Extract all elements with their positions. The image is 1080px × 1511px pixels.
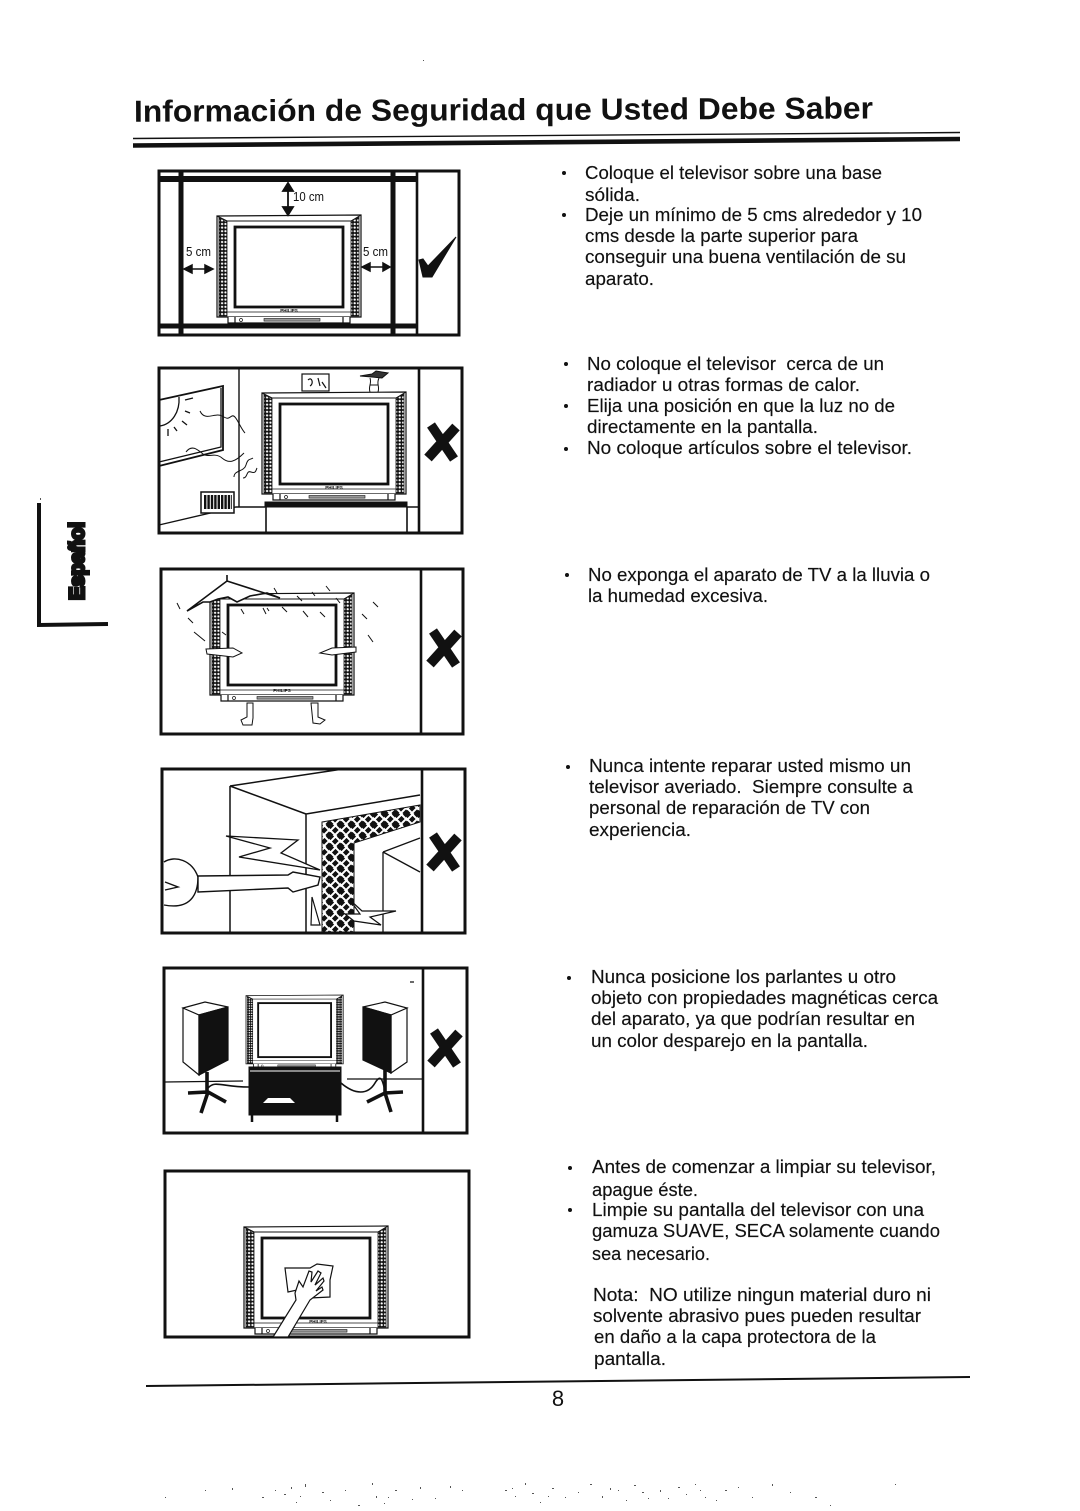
page number: 8 — [552, 1386, 564, 1411]
text block: placement and ventilation — [562, 162, 922, 289]
icon: cross — [430, 835, 458, 869]
television — [217, 215, 361, 323]
text block: placement and ventilation: cms desde la parte superior para — [585, 225, 859, 246]
label: 5 cm right: 5 cm — [363, 245, 388, 259]
text block: repair warning: personal de reparación de TV con — [589, 797, 870, 818]
icon: cross — [430, 631, 458, 665]
legs — [241, 703, 325, 725]
right speaker — [363, 1002, 407, 1112]
text block: cleaning instructions: sea necesario. — [592, 1243, 710, 1264]
radiator vent — [201, 492, 234, 513]
text block: heat and light: Elija una posición en que la luz no de — [587, 395, 895, 416]
vase on television — [360, 371, 388, 392]
brand label: PHILIPS — [280, 308, 298, 313]
brand label: PHILIPS — [325, 485, 343, 490]
text block: rain and humidity: No exponga el aparato de TV a la lluvia o — [588, 564, 930, 585]
text block: note: Nota: NO utilize ningun material duro ni — [593, 1284, 931, 1305]
cabinet lines — [230, 769, 420, 932]
brand label: PHILIPS — [273, 688, 291, 693]
text block: placement and ventilation: conseguir una buena ventilación de su — [585, 246, 906, 267]
text block: heat and light: No coloque artículos sobre el televisor. — [587, 437, 912, 458]
hand — [273, 1271, 324, 1337]
text block: repair warning — [566, 755, 914, 840]
woven back panel — [322, 805, 420, 932]
panel: speakers and magnets — [164, 968, 467, 1133]
text block: note: en daño a la capa protectora de la — [594, 1326, 877, 1347]
text block: placement and ventilation: aparato. — [585, 268, 654, 289]
text block: heat and light: directamente en la pantalla. — [587, 416, 818, 437]
side tab: language marker — [39, 503, 108, 625]
label: 5 cm left: 5 cm — [186, 245, 211, 259]
cleaning cloth — [285, 1264, 333, 1298]
text block: placement and ventilation: Deje un mínimo de 5 cms alrededor y 10 — [585, 204, 922, 225]
text block: repair warning: televisor averiado. Siempre consulte a — [589, 776, 914, 797]
text block: note: solvente abrasivo pues pueden resultar — [593, 1305, 921, 1326]
text block: cleaning instructions: Antes de comenzar a limpiar su televisor, — [592, 1156, 936, 1177]
panel: heat, sunlight and objects on top — [159, 368, 462, 533]
text block: repair warning: experiencia. — [589, 819, 691, 840]
icon: check mark — [419, 237, 456, 277]
text block: cleaning instructions: apague éste. — [592, 1179, 698, 1200]
hands carrying television — [206, 647, 356, 657]
roof over television — [187, 575, 280, 611]
text block: magnetic objects: del aparato, ya que podrían resultar en — [591, 1008, 915, 1029]
text block: placement and ventilation: sólida. — [585, 184, 640, 205]
text block: repair warning: Nunca intente reparar usted mismo un — [589, 755, 911, 776]
text block: heat and light: radiador u otras formas de calor. — [587, 374, 860, 395]
arrow: 10 cm clearance — [283, 183, 293, 215]
picture frame on television — [302, 374, 329, 391]
arrow: left clearance — [184, 265, 213, 273]
left speaker — [183, 1002, 228, 1113]
text block: magnetic objects: Nunca posicione los parlantes u otro — [591, 966, 896, 987]
television — [262, 392, 406, 500]
text block: magnetic objects: objeto con propiedades magnéticas cerca — [591, 987, 939, 1008]
panel: correct ventilation clearance — [159, 171, 459, 335]
heat waves — [186, 411, 257, 478]
text block: heat and light — [564, 353, 912, 458]
lightning bolt upper — [226, 836, 320, 870]
panel: rain and moisture — [161, 569, 463, 734]
text block: placement and ventilation: Coloque el televisor sobre una base — [585, 162, 882, 183]
text block: cleaning instructions — [568, 1156, 940, 1264]
text block: cleaning instructions: gamuza SUAVE, SECA solamente cuando — [592, 1220, 940, 1241]
text block: note — [593, 1284, 931, 1369]
brand label: PHILIPS — [309, 1319, 327, 1324]
cabinet — [249, 1067, 341, 1122]
speaker cables — [208, 1078, 385, 1092]
title: Información de Seguridad que Usted Debe Saber — [134, 91, 873, 129]
text block: note: pantalla. — [594, 1348, 666, 1369]
rain — [177, 586, 378, 642]
title double rule — [133, 132, 960, 146]
text block: magnetic objects: un color desparejo en la pantalla. — [591, 1030, 868, 1051]
text block: heat and light: No coloque el televisor cerca de un — [587, 353, 884, 374]
television — [210, 593, 354, 701]
lightning bolt lower — [345, 900, 396, 925]
text block: magnetic objects — [567, 966, 939, 1051]
arrow: right clearance — [362, 263, 390, 271]
stand — [265, 502, 407, 532]
text block: cleaning instructions: Limpie su pantalla del televisor con una — [592, 1199, 925, 1220]
icon: cross — [428, 425, 456, 459]
side tab: language marker: Español — [66, 522, 89, 600]
television — [244, 1226, 388, 1334]
panel: do not repair — [162, 769, 465, 933]
text block: rain and humidity — [565, 564, 930, 606]
panel: cleaning the screen — [165, 1171, 469, 1337]
television — [246, 995, 343, 1068]
text block: rain and humidity: la humedad excesiva. — [588, 585, 768, 606]
window with sun — [159, 386, 223, 466]
screwdriver — [164, 859, 320, 906]
icon: cross — [431, 1031, 459, 1065]
label: 10 cm: 10 cm — [293, 190, 324, 204]
